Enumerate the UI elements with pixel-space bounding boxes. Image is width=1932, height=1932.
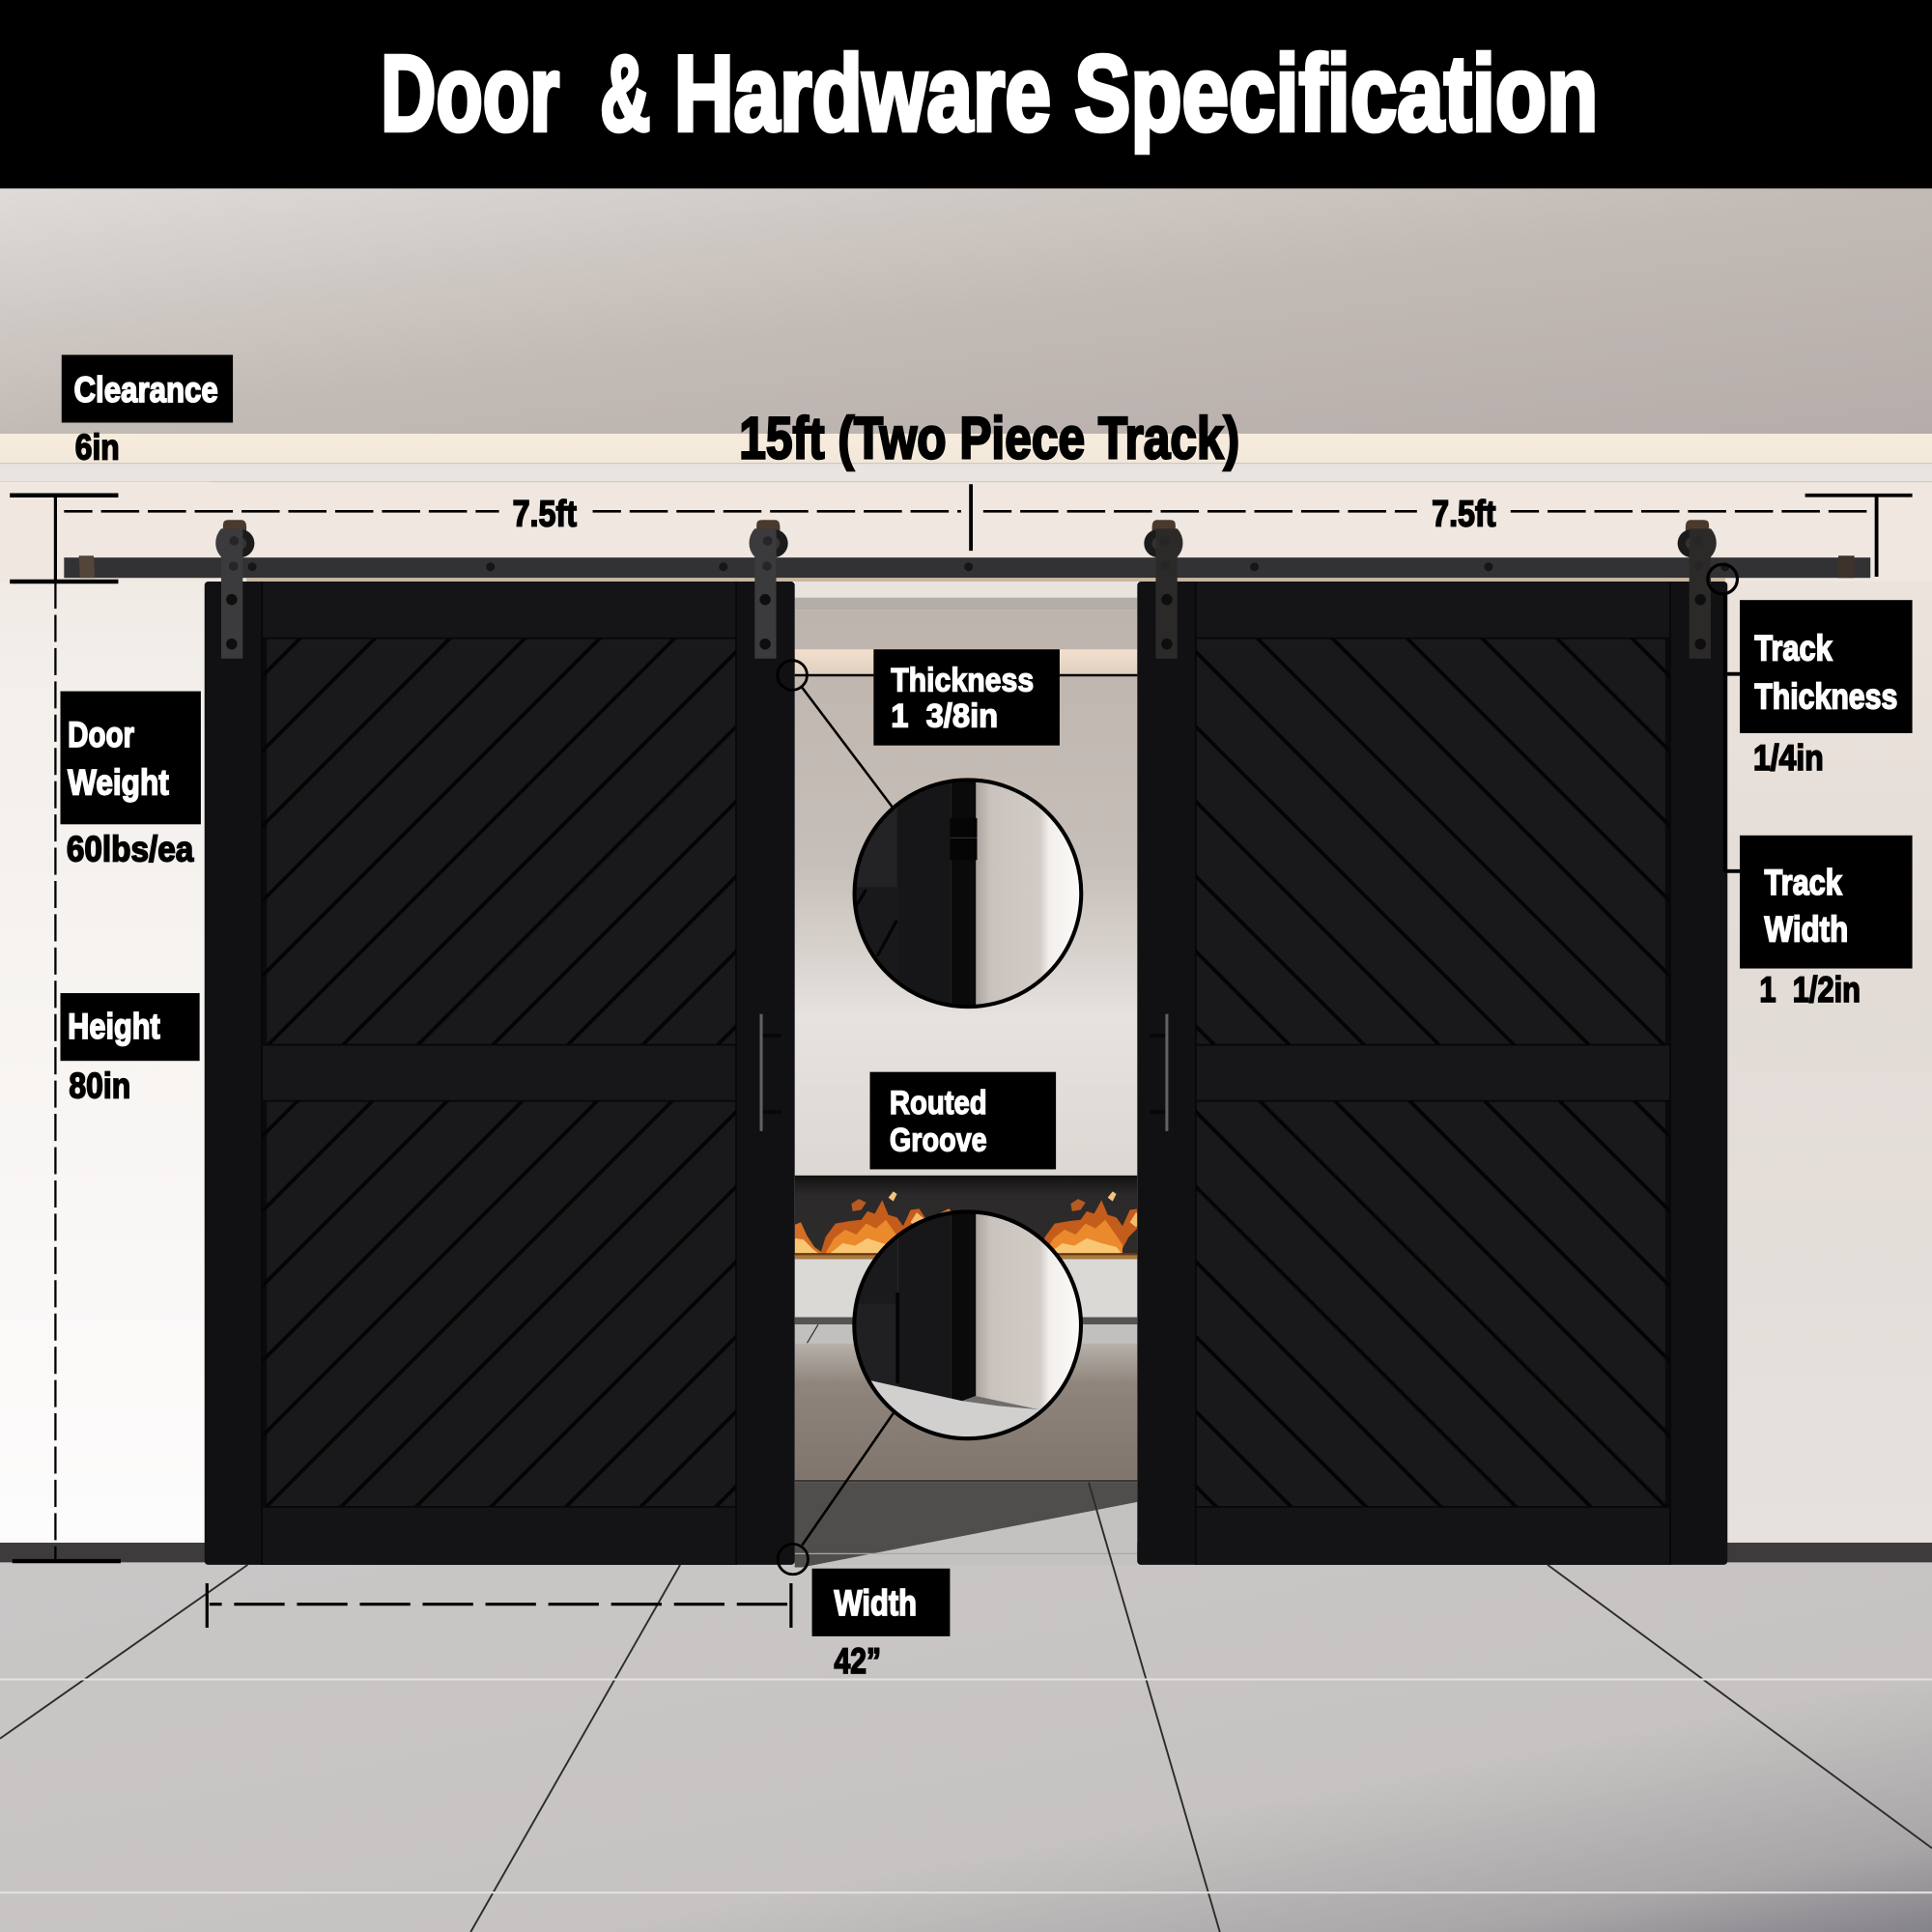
door width dimension line xyxy=(207,1583,791,1628)
track segment dimension line: 7.5ft xyxy=(513,494,577,535)
track length heading: 15ft (Two Piece Track) xyxy=(739,405,1239,470)
title banner: Hardware xyxy=(674,34,1051,154)
cove light xyxy=(0,434,1932,464)
track width label: Width xyxy=(1765,909,1848,949)
clearance label: 6in xyxy=(75,428,120,468)
left door handle xyxy=(759,1014,781,1131)
door weight label: Door xyxy=(68,715,134,754)
moulding xyxy=(0,464,1932,482)
routed groove label: Routed xyxy=(890,1085,987,1122)
width label xyxy=(812,1569,950,1681)
thickness leader xyxy=(778,661,1137,809)
height label xyxy=(60,993,200,1105)
left wall xyxy=(0,482,210,1543)
height label: Height xyxy=(68,1007,160,1046)
upper wall behind track xyxy=(0,482,1932,582)
track thickness label xyxy=(1740,600,1913,778)
width label: Width xyxy=(835,1583,917,1623)
track width label xyxy=(1740,836,1913,1009)
clearance label: Clearance xyxy=(74,370,218,410)
track width label: Track xyxy=(1765,863,1842,902)
floor xyxy=(0,1482,1932,1932)
door weight label xyxy=(60,692,201,869)
right wall xyxy=(1725,582,1932,1543)
track bracket leader xyxy=(1708,564,1740,872)
track rail xyxy=(64,555,1870,582)
baseboard xyxy=(0,1543,1932,1564)
width label: 42” xyxy=(835,1641,881,1681)
magnifier: routed groove xyxy=(850,1208,1084,1444)
title banner: & xyxy=(600,34,650,154)
hanger 3 xyxy=(1144,520,1182,659)
magnifier: door thickness xyxy=(850,777,1084,1010)
track segment dimension line xyxy=(64,484,1913,577)
routed groove label xyxy=(870,1072,1056,1169)
routed groove label: Groove xyxy=(890,1122,987,1158)
title banner: Specification xyxy=(1074,34,1598,154)
left door xyxy=(0,582,1147,1565)
centre opening: room behind the doors xyxy=(794,582,1138,1567)
hanger 1 xyxy=(215,520,254,659)
hanger 4 xyxy=(1678,520,1717,659)
track thickness label: 1/4in xyxy=(1753,738,1824,778)
track segment dimension line: 7.5ft xyxy=(1432,494,1496,535)
door weight label: Weight xyxy=(68,763,169,803)
track thickness label: Track xyxy=(1754,629,1833,668)
title banner: Door xyxy=(381,34,559,154)
thickness label: 1 3/8in xyxy=(891,698,998,735)
track width label: 1 1/2in xyxy=(1759,970,1861,1009)
door weight label: 60lbs/ea xyxy=(67,830,194,869)
ceiling xyxy=(0,188,1932,434)
height label: 80in xyxy=(69,1065,130,1105)
clearance label xyxy=(62,355,233,468)
thickness label: Thickness xyxy=(891,663,1034,699)
hanger 2 xyxy=(750,520,788,659)
title banner xyxy=(0,0,1932,188)
right door xyxy=(785,582,1932,1565)
right door handle xyxy=(1150,1014,1168,1131)
track thickness label: Thickness xyxy=(1754,676,1897,716)
groove leader xyxy=(778,1413,894,1575)
thickness label xyxy=(873,649,1060,746)
door height and clearance dimension lines xyxy=(10,496,121,1561)
